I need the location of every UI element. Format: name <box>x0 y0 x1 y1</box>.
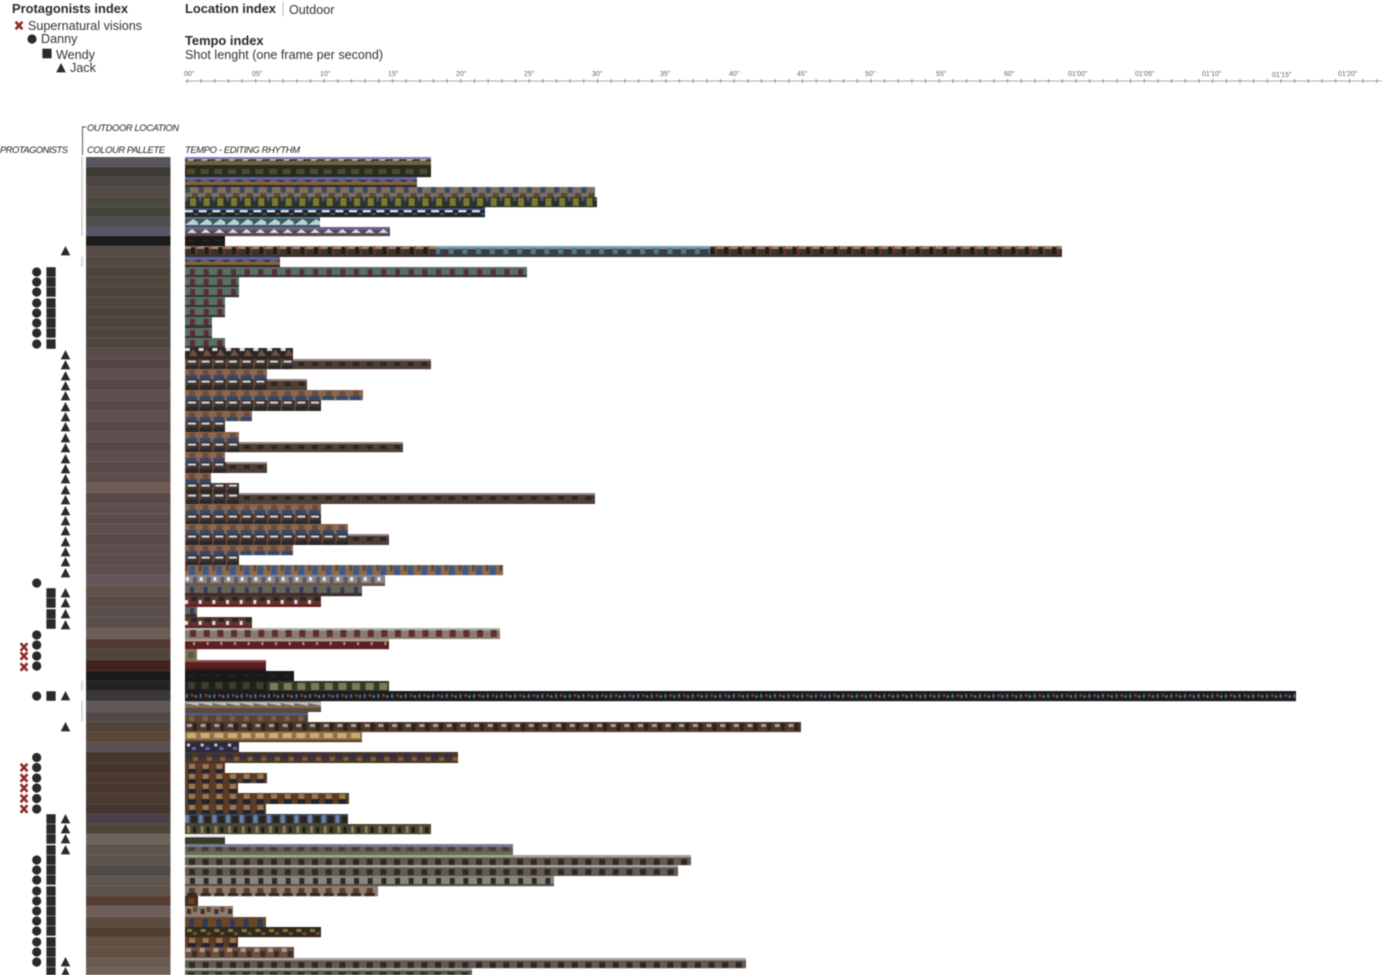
time axis: 01'05" <box>1135 71 1155 78</box>
tempo bars: one row per shot, one frame per second <box>185 157 1296 975</box>
time axis: 25" <box>524 71 535 78</box>
time axis: 40" <box>729 71 740 78</box>
legend item: Wendy: Wendy <box>56 48 96 62</box>
time axis: 60" <box>1004 71 1015 78</box>
time axis <box>184 71 1382 81</box>
legend: tempo index: Tempo index <box>185 33 264 48</box>
time axis: 35" <box>660 71 671 78</box>
column heading: colour pallete: COLOUR PALLETE <box>87 144 166 155</box>
legend: location index: Location index <box>185 1 277 16</box>
time axis: 50" <box>865 71 876 78</box>
time axis: 01'10" <box>1202 71 1222 78</box>
time axis: 30" <box>592 71 603 78</box>
time axis: 01'20" <box>1338 71 1358 78</box>
time axis: 01'00" <box>1068 71 1088 78</box>
column heading: outdoor location with bracket: OUTDOOR LOCATION <box>87 122 179 133</box>
outdoor location markers <box>81 157 83 722</box>
legend: location index <box>185 1 335 17</box>
legend item: Jack: Jack <box>70 61 97 75</box>
legend: location index: Outdoor <box>289 3 335 17</box>
colour palette strip <box>86 157 170 975</box>
heading: protagonists index: Protagonists index <box>12 1 129 16</box>
legend: tempo index <box>185 33 383 62</box>
legend item: Danny: Danny <box>41 32 78 46</box>
protagonists markers by shot <box>21 246 70 975</box>
column heading: outdoor location with bracket <box>82 122 179 155</box>
time axis: 15" <box>388 71 399 78</box>
legend: tempo index: Shot lenght (one frame per second) <box>185 48 383 62</box>
time axis: 10" <box>320 71 331 78</box>
column heading: tempo editing rhythm: TEMPO - EDITING RHYTHM <box>185 144 300 155</box>
time axis: 00" <box>184 71 195 78</box>
time axis: 45" <box>797 71 808 78</box>
legend: protagonists index <box>12 1 142 75</box>
time axis: 01'15" <box>1272 72 1292 79</box>
time axis: 20" <box>456 71 467 78</box>
time axis: 05" <box>252 71 263 78</box>
time axis: 55" <box>936 71 947 78</box>
legend item: supernatural visions: Supernatural visions <box>28 19 142 33</box>
column heading: protagonists: PROTAGONISTS <box>0 144 69 155</box>
